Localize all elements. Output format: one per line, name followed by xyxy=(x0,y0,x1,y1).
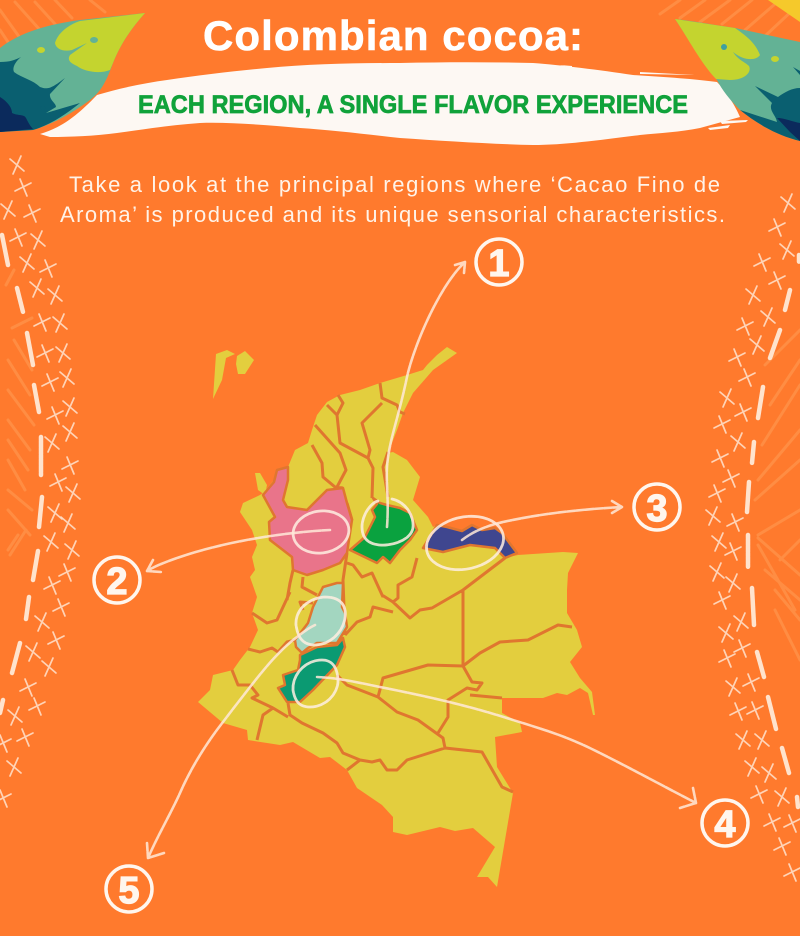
arrow 1 xyxy=(387,262,465,527)
right chalk decoration xyxy=(706,194,800,881)
number badge 2: 2 xyxy=(106,561,128,603)
number badge 3: 3 xyxy=(646,488,668,530)
icon: left leaf xyxy=(0,13,145,132)
intro text: Aroma’ is produced and its unique sensorial characteristics. xyxy=(60,202,725,227)
number badge 4 xyxy=(702,800,748,846)
subtitle: EACH REGION, A SINGLE FLAVOR EXPERIENCE xyxy=(138,91,688,119)
icon: right leaf xyxy=(675,19,800,141)
region: pink xyxy=(263,467,352,575)
number badge 5 xyxy=(106,866,152,912)
region: indigo xyxy=(423,525,517,558)
intro text: Take a look at the principal regions where ‘Cacao Fino de xyxy=(69,172,720,197)
arrow 5 xyxy=(147,625,315,858)
number badge 1: 1 xyxy=(488,243,510,285)
country outline xyxy=(198,347,595,887)
region: teal xyxy=(278,638,345,702)
chalk ellipses around regions xyxy=(290,499,509,707)
region: mint xyxy=(295,583,347,653)
number badge 4: 4 xyxy=(714,804,736,846)
left chalk decoration xyxy=(0,156,80,807)
number badge 1 xyxy=(476,239,522,285)
corner accent: yellow top right xyxy=(768,0,800,22)
map of Colombia xyxy=(198,347,595,887)
arrow 3 xyxy=(462,501,622,540)
region: green xyxy=(350,498,417,563)
white brush stroke banner xyxy=(40,62,748,145)
number badge 3 xyxy=(634,484,680,530)
intro text xyxy=(60,172,725,227)
arrow 2 xyxy=(147,530,330,572)
number badge 2 xyxy=(94,557,140,603)
number badge 5: 5 xyxy=(118,870,140,912)
coastal islet xyxy=(255,473,267,495)
arrow 4 xyxy=(317,677,696,808)
title: Colombian cocoa: xyxy=(203,12,583,59)
island: San Andres xyxy=(213,350,254,399)
department borders xyxy=(232,383,572,792)
